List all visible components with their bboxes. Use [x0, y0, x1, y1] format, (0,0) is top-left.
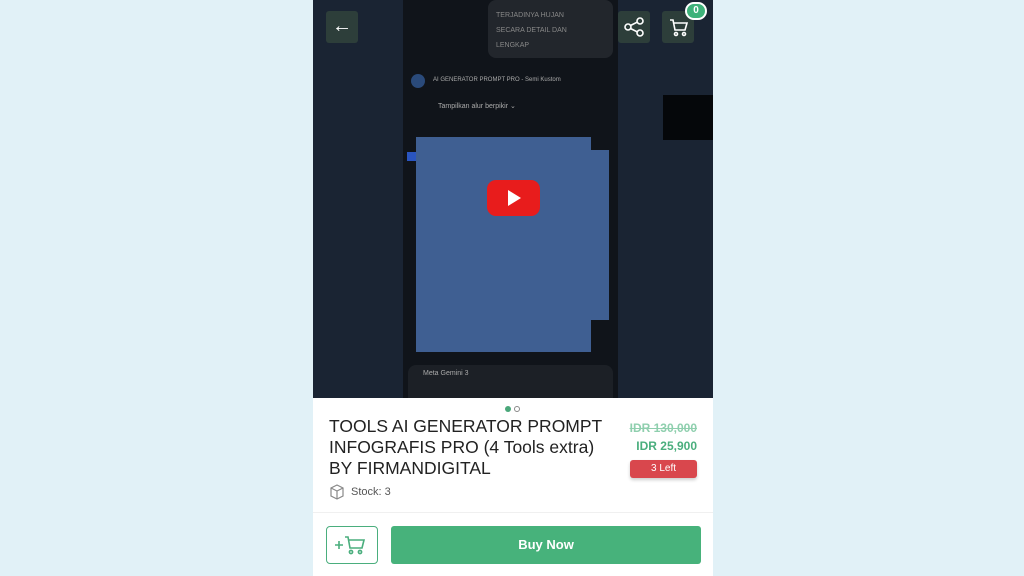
video thumbnail: Meta Gemini 3: [423, 370, 469, 377]
panel: product card: IDR 25,900: [636, 439, 697, 453]
buy now button: Buy Now: [518, 537, 574, 552]
icon: share button: [618, 11, 650, 43]
cart badge: [685, 2, 707, 20]
prices: IDR 130,000: [630, 421, 697, 435]
add to cart button: [326, 526, 378, 564]
panel: product card: [313, 0, 713, 576]
video thumbnail: [313, 0, 713, 398]
video thumbnail: Tampilkan alur berpikir ⌄: [438, 103, 516, 110]
video thumbnail: SECARA DETAIL DAN: [496, 27, 567, 34]
buy now button: [391, 526, 701, 564]
video thumbnail: TERJADINYA HUJAN: [496, 12, 564, 19]
stock: [330, 484, 391, 500]
badge: 3 left: 3 Left: [651, 463, 676, 474]
carousel dots: [505, 406, 520, 412]
badge: 3 left: [630, 460, 697, 478]
video thumbnail: AI GENERATOR PROMPT PRO - Semi Kustom: [433, 77, 561, 83]
icon: back button: [326, 11, 358, 43]
icon: play button: [487, 180, 540, 216]
product title: TOOLS AI GENERATOR PROMPT INFOGRAFIS PRO (4 Tools extra) BY FIRMANDIGITAL: [329, 416, 602, 478]
icon: cart button: [662, 11, 694, 43]
icon: back button: ←: [332, 15, 352, 37]
cart badge: 0: [693, 5, 699, 16]
stock: Stock: 3: [351, 486, 391, 498]
video thumbnail: LENGKAP: [496, 42, 529, 49]
